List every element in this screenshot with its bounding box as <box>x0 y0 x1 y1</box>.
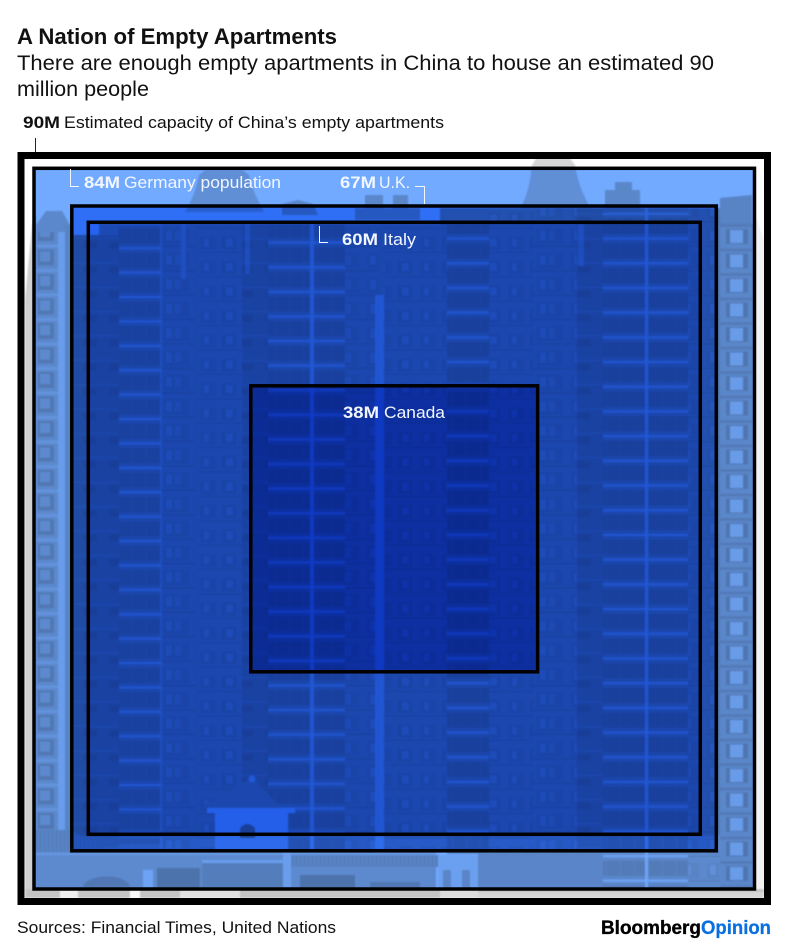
label: 84M Germany: 84M <box>84 174 120 192</box>
label: 38M Canada <box>343 404 446 422</box>
label: 38M Canada: 38M <box>343 404 379 422</box>
square: 84M Germany <box>34 168 754 889</box>
rooftop blocks <box>282 182 640 220</box>
logo: Bloomberg Opinion: Opinion <box>701 917 771 939</box>
right tower <box>720 195 753 888</box>
right edge building, grey <box>756 220 764 888</box>
left dome <box>185 170 264 212</box>
source note: Sources: Financial Times, United Nations <box>17 919 336 937</box>
title: A Nation of Empty Apartments <box>17 24 337 49</box>
label: 84M Germany <box>70 169 281 192</box>
square: 67M U.K. <box>72 206 716 851</box>
square: 90M China <box>21 156 768 902</box>
label: 38M Canada: Canada <box>384 404 446 422</box>
label: 90M China capacity: 90M <box>23 114 60 132</box>
square: 38M Canada <box>251 386 538 672</box>
main tower: facade columns <box>73 208 720 888</box>
square: 60M Italy <box>88 222 700 834</box>
logo: Bloomberg Opinion: Bloomberg <box>601 917 701 939</box>
label: 67M U.K. <box>340 174 424 204</box>
label: 60M Italy <box>320 226 417 249</box>
label: 60M Italy: 60M <box>342 231 378 249</box>
label: 84M Germany: Germany population <box>124 174 281 192</box>
building photograph <box>25 157 764 898</box>
label: 90M China capacity <box>23 114 444 152</box>
main tower base tone <box>106 208 490 849</box>
square fills: population tints <box>34 168 754 889</box>
main tower: shadow tone <box>73 208 720 836</box>
right dome <box>521 159 590 208</box>
subtitle: There are enough empty apartments in China to house an estimated 90 <box>17 52 714 75</box>
pagoda <box>200 776 295 850</box>
subtitle: million people <box>17 78 149 101</box>
left edge building, grey <box>25 215 36 898</box>
label: 67M U.K.: 67M <box>340 174 376 192</box>
subtitle <box>17 52 714 101</box>
low buildings at street level <box>25 830 764 898</box>
main tower: light vertical piers <box>160 208 648 888</box>
photo contents, softened <box>25 157 764 898</box>
left tower <box>36 211 73 835</box>
logo: Bloomberg Opinion <box>601 917 771 939</box>
label: 60M Italy: Italy <box>383 231 417 249</box>
label: 67M U.K.: U.K. <box>379 174 410 192</box>
label: 90M China capacity: Estimated capacity of China’s empty apartments <box>64 114 444 132</box>
